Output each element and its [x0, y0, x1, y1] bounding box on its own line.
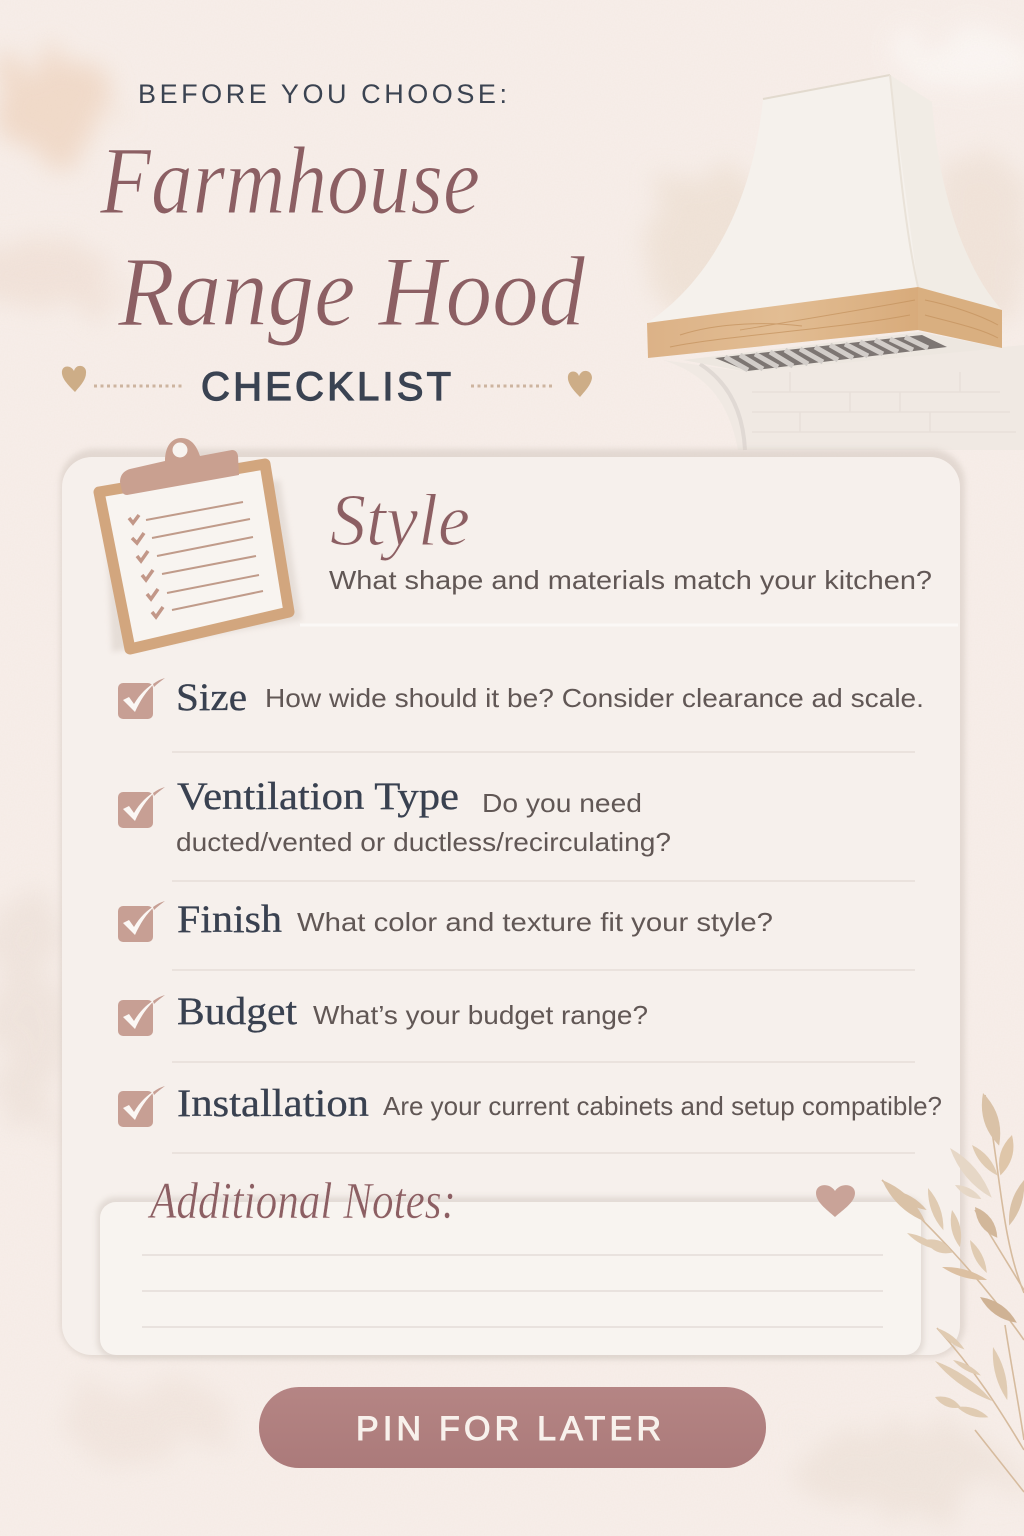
button: pin for later: [259, 1387, 766, 1468]
item: Size: Size: [176, 676, 247, 719]
hood body: [647, 75, 1002, 323]
panel: checklist card: [60, 449, 965, 1358]
title: Farmhouse Range Hood: Farmhouse: [99, 127, 480, 234]
item: Finish: [118, 898, 773, 942]
title: Farmhouse Range Hood: [99, 127, 586, 347]
panel: additional notes: Additional Notes:: [148, 1173, 456, 1230]
icon: notes heart: [816, 1185, 855, 1217]
title: Farmhouse Range Hood: Range Hood: [117, 236, 586, 347]
icon: clipboard: [99, 438, 302, 652]
range hood illustration: [647, 75, 1024, 450]
button: pin for later: PIN FOR LATER: [356, 1410, 661, 1448]
illustration: dried wheat: [878, 1091, 1024, 1492]
item: Installation: [118, 1082, 942, 1127]
item: Size: [118, 676, 924, 719]
item: Ventilation Type: [118, 775, 671, 857]
item: Budget: Budget: [177, 990, 297, 1033]
item: Installation: Are your current cabinets and setup compatible?: [383, 1091, 942, 1121]
wood band front: [647, 287, 918, 358]
item: Installation: Installation: [177, 1082, 369, 1125]
heading: Style: Style: [330, 480, 470, 562]
wood grain: [670, 300, 998, 347]
subtitle: checklist with hearts: [62, 365, 592, 409]
subtitle: checklist with hearts: CHECKLIST: [201, 365, 451, 409]
hood vent: [683, 332, 1002, 372]
item: Finish: What color and texture fit your style?: [297, 907, 773, 937]
item: Finish: Finish: [177, 898, 282, 941]
text: style description: What shape and materials match your kitchen?: [329, 565, 932, 595]
item: Budget: What’s your budget range?: [313, 1000, 648, 1030]
wood band side: [918, 287, 1002, 348]
item: Ventilation Type: Do you need: [482, 788, 642, 818]
item: Size: How wide should it be? Consider clearance ad scale.: [265, 683, 924, 713]
panel: additional notes: [97, 1173, 924, 1359]
item: Ventilation Type: Ventilation Type: [177, 775, 459, 818]
item: Budget: [118, 990, 648, 1036]
heading: before you choose: BEFORE YOU CHOOSE:: [138, 79, 507, 109]
item: Ventilation Type: ducted/vented or ductless/recirculating?: [176, 827, 671, 857]
lower wall and arch support: [663, 345, 1024, 450]
